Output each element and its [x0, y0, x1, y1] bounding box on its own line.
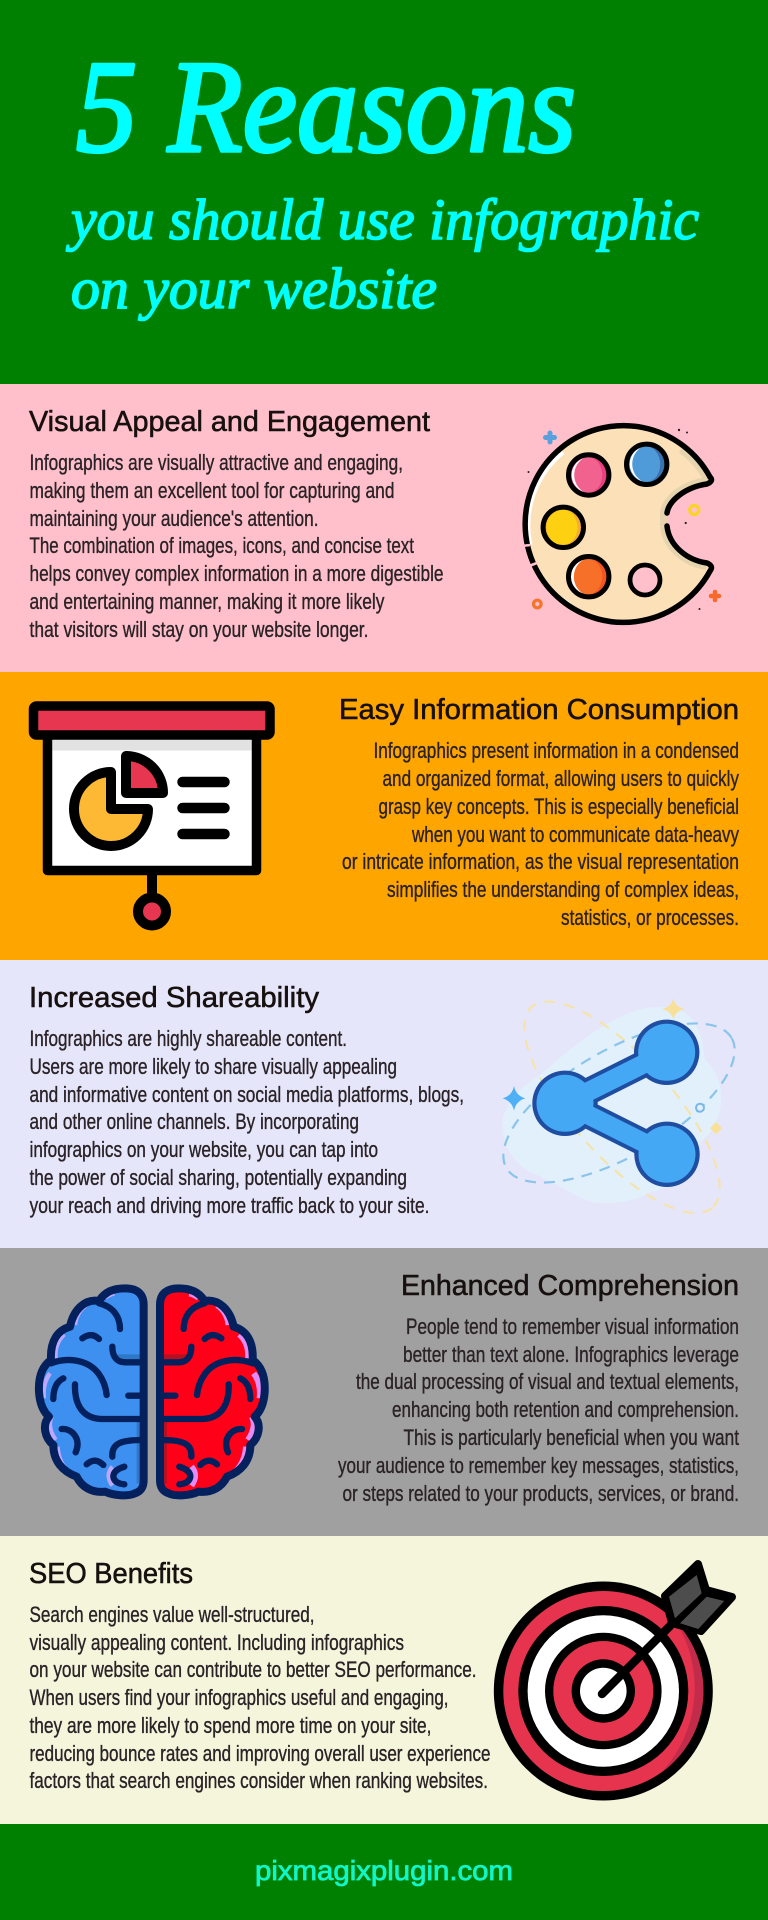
body text: seo: reducing bounce rates and improving overall user experience: [30, 1741, 490, 1766]
icon: share symbol: [480, 974, 758, 1241]
body text: shareability: [30, 1026, 464, 1218]
icon: target with arrow: [494, 1564, 732, 1800]
body text: seo: they are more likely to spend more time on your site,: [30, 1713, 432, 1738]
body text: comprehension: [338, 1314, 739, 1506]
panel: increased shareability: [0, 960, 768, 1248]
subtitle: on your website: [71, 256, 437, 321]
body text: seo: factors that search engines consider when ranking websites.: [30, 1768, 488, 1793]
icon: presentation board: [34, 706, 270, 926]
body text: shareability: and other online channels. By incorporating: [30, 1109, 359, 1134]
body text: visual appeal: and entertaining manner, making it more likely: [30, 589, 384, 614]
body text: shareability: and informative content on social media platforms, blogs,: [30, 1082, 464, 1107]
body text: shareability: Users are more likely to share visually appealing: [30, 1054, 397, 1079]
icon: brain: [39, 1288, 265, 1495]
title: 5 Reasons: [76, 33, 576, 180]
heading: comprehension: Enhanced Comprehension: [401, 1270, 739, 1302]
palette well: pink: [568, 455, 609, 495]
body text: visual appeal: [30, 450, 444, 642]
body text: visual appeal: making them an excellent tool for capturing and: [30, 478, 394, 503]
body text: visual appeal: helps convey complex information in a more digestible: [30, 561, 444, 586]
subtitle: [66, 187, 699, 321]
panel: enhanced comprehension: [0, 1248, 768, 1536]
panel: header: [0, 0, 768, 384]
subtitle: you should use infographic: [66, 187, 699, 252]
palette well: yellow: [543, 507, 584, 548]
body text: seo: visually appealing content. Including infographics: [30, 1630, 404, 1655]
body text: visual appeal: The combination of images, icons, and concise text: [30, 533, 414, 558]
body text: easy information: [342, 738, 739, 930]
palette well: orange: [568, 556, 609, 597]
heading: easy information: Easy Information Consumption: [339, 694, 739, 726]
body text: seo: on your website can contribute to better SEO performance.: [30, 1657, 476, 1682]
body text: shareability: Infographics are highly shareable content.: [30, 1026, 347, 1051]
body text: seo: Search engines value well-structured,: [30, 1602, 314, 1627]
brain: left hemisphere: [39, 1288, 144, 1495]
palette well: blue: [626, 444, 667, 484]
footer website text: pixmagixplugin.com: [255, 1855, 513, 1886]
panel: footer: [0, 1824, 768, 1920]
heading: visual appeal: Visual Appeal and Engagement: [29, 406, 430, 438]
body text: shareability: the power of social sharing, potentially expanding: [30, 1165, 407, 1190]
heading: seo: SEO Benefits: [29, 1558, 193, 1590]
icon: paint palette: [522, 426, 719, 622]
panel: easy information consumption: [0, 672, 768, 960]
brain: right hemisphere: [160, 1288, 265, 1495]
body text: seo: When users find your infographics useful and engaging,: [30, 1685, 448, 1710]
body text: shareability: your reach and driving more traffic back to your site.: [30, 1193, 430, 1218]
body text: seo: [30, 1602, 490, 1793]
heading: shareability: Increased Shareability: [29, 982, 320, 1014]
palette well: empty: [630, 565, 660, 595]
body text: shareability: infographics on your website, you can tap into: [30, 1137, 378, 1162]
body text: visual appeal: that visitors will stay on your website longer.: [30, 617, 368, 642]
body text: visual appeal: maintaining your audience's attention.: [30, 506, 318, 531]
body text: visual appeal: Infographics are visually attractive and engaging,: [30, 450, 403, 475]
panel: visual appeal and engagement: [0, 384, 768, 672]
panel: seo benefits: [0, 1536, 768, 1824]
